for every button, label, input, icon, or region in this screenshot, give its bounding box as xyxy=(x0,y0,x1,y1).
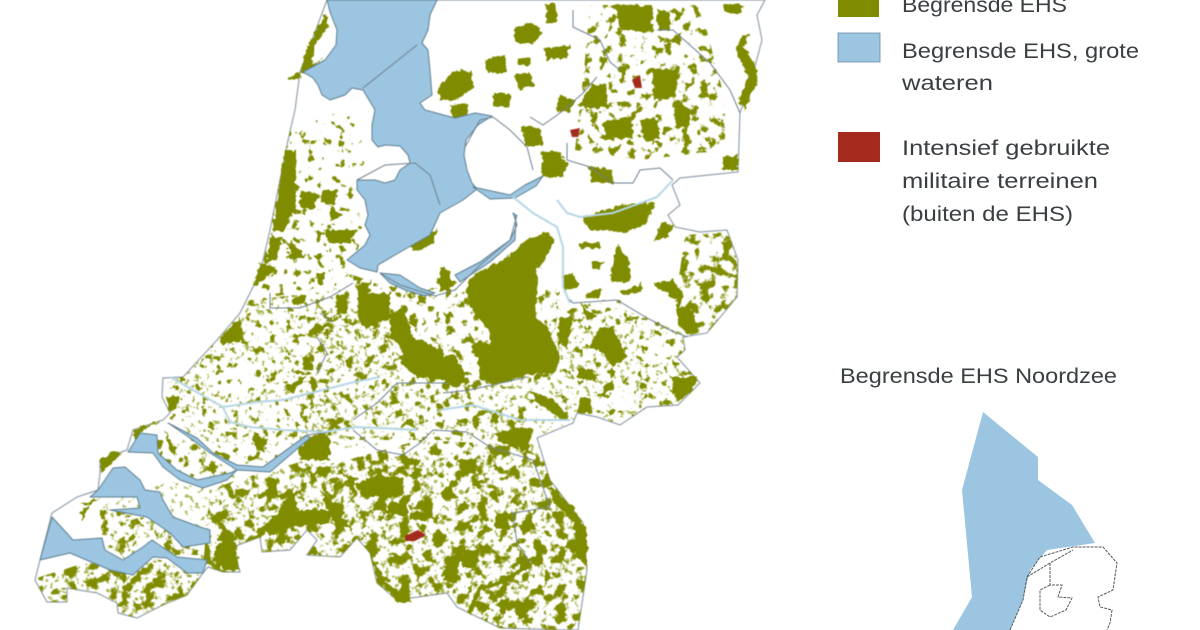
legend xyxy=(838,0,1139,226)
Ketelmeer and Randmeren xyxy=(380,176,543,296)
map: Netherlands xyxy=(0,0,800,630)
water bodies xyxy=(40,0,543,575)
Haringvliet and Hollands Diep xyxy=(128,423,310,488)
Oosterschelde xyxy=(90,467,210,547)
Utrechtse Heuvelrug xyxy=(358,280,447,380)
military terrain xyxy=(405,75,642,541)
land outline xyxy=(35,0,765,630)
Flevoland and Randstad areas xyxy=(167,190,450,450)
Westerschelde xyxy=(40,517,207,575)
EHS nature areas xyxy=(80,4,758,630)
legend item: militaire terreinen: Intensief gebruikte xyxy=(902,137,1110,160)
inset map: Noordzee xyxy=(953,412,1117,630)
Northern areas xyxy=(438,4,743,183)
legend item: militaire terreinen: militaire terreinen xyxy=(902,170,1098,193)
Overijssel and Gelderland areas xyxy=(440,203,697,440)
legend item: grote wateren: Begrensde EHS, grote xyxy=(902,40,1139,63)
heading: Noordzee inset: Begrensde EHS Noordzee xyxy=(840,365,1117,388)
legend item: grote wateren: wateren xyxy=(901,72,993,95)
Veluwe xyxy=(466,232,560,385)
rivers xyxy=(170,180,673,432)
legend item: militaire terreinen xyxy=(838,132,1110,226)
EHS speckle pattern xyxy=(37,4,738,630)
legend item: grote wateren xyxy=(838,33,1139,95)
dune strips xyxy=(272,14,329,232)
mini Netherlands outline xyxy=(1010,547,1117,630)
North Sea area xyxy=(953,412,1095,630)
IJsselmeer and Waddenzee xyxy=(303,0,492,272)
legend item: Begrensde EHS xyxy=(838,0,1067,17)
provincial borders xyxy=(263,10,740,563)
Southern areas xyxy=(80,420,587,630)
legend item: militaire terreinen: (buiten de EHS) xyxy=(902,203,1073,226)
open farmland clearings xyxy=(213,336,675,453)
